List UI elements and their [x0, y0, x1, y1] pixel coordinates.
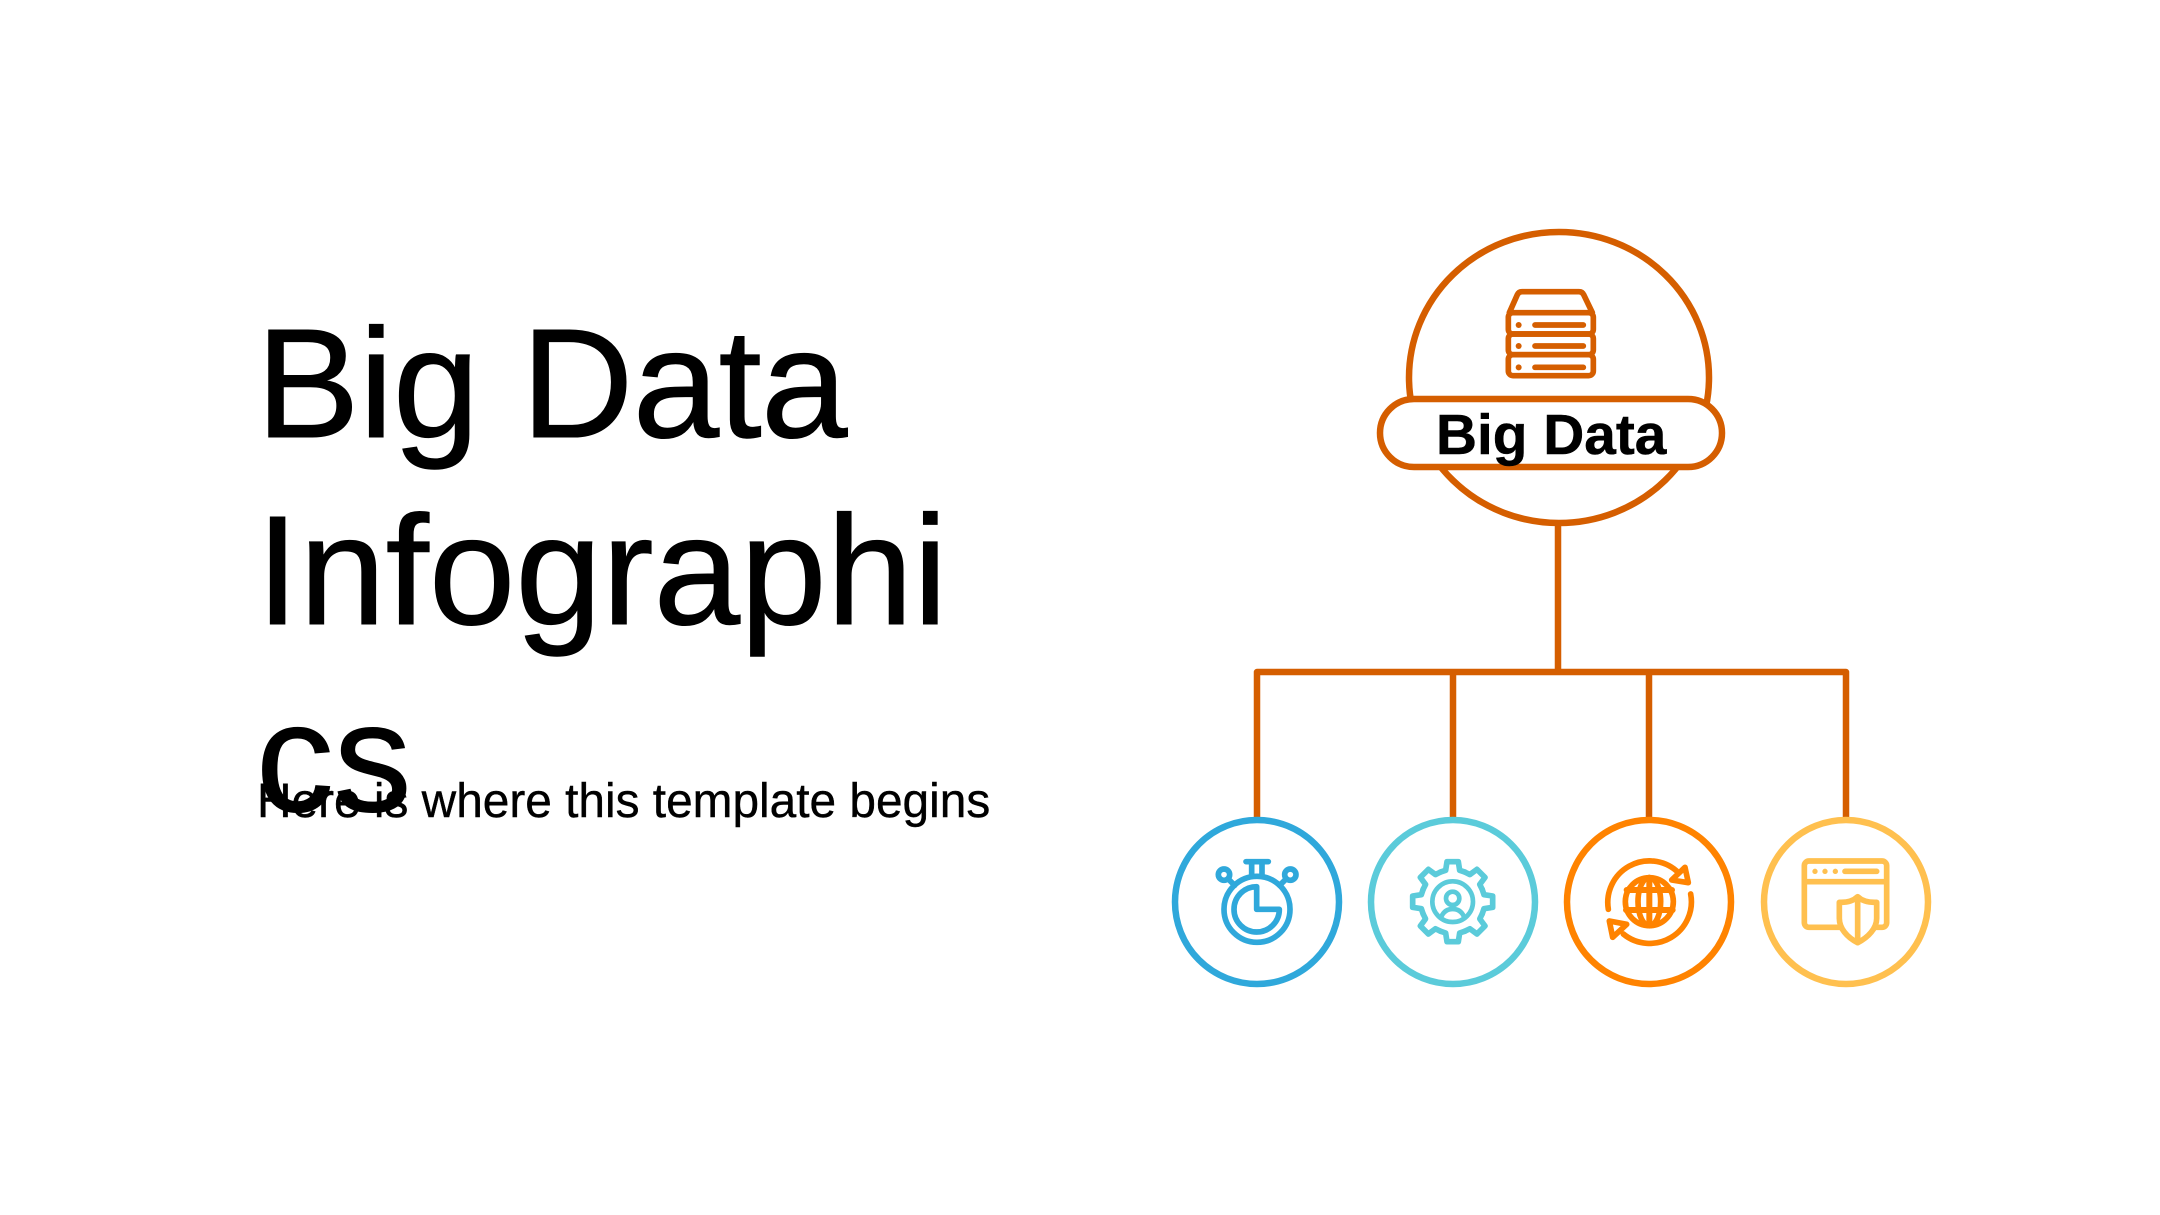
node circle [1409, 232, 1709, 523]
icon: browser with shield [1804, 861, 1887, 943]
subtitle: Here is where this template begins [257, 775, 990, 828]
icon: server stack [1508, 292, 1593, 376]
node ring [1175, 820, 1339, 984]
icon: rotating globe [1608, 861, 1691, 943]
node: stopwatch [1175, 820, 1339, 984]
node ring [1371, 820, 1535, 984]
node ring [1764, 820, 1928, 984]
node label pill [1380, 399, 1722, 467]
node: globe [1567, 820, 1731, 984]
title: Big Data [256, 296, 848, 470]
node: browser shield [1764, 820, 1928, 984]
title [256, 296, 948, 844]
title: cs [256, 670, 412, 844]
node ring [1567, 820, 1731, 984]
icon: user gear [1413, 862, 1493, 942]
title: Infographi [256, 483, 948, 657]
icon: stopwatch [1218, 862, 1296, 942]
big data node [1380, 232, 1722, 523]
node: gear [1371, 820, 1535, 984]
node label: Big Data [1436, 404, 1667, 467]
connector lines [1257, 526, 1846, 820]
